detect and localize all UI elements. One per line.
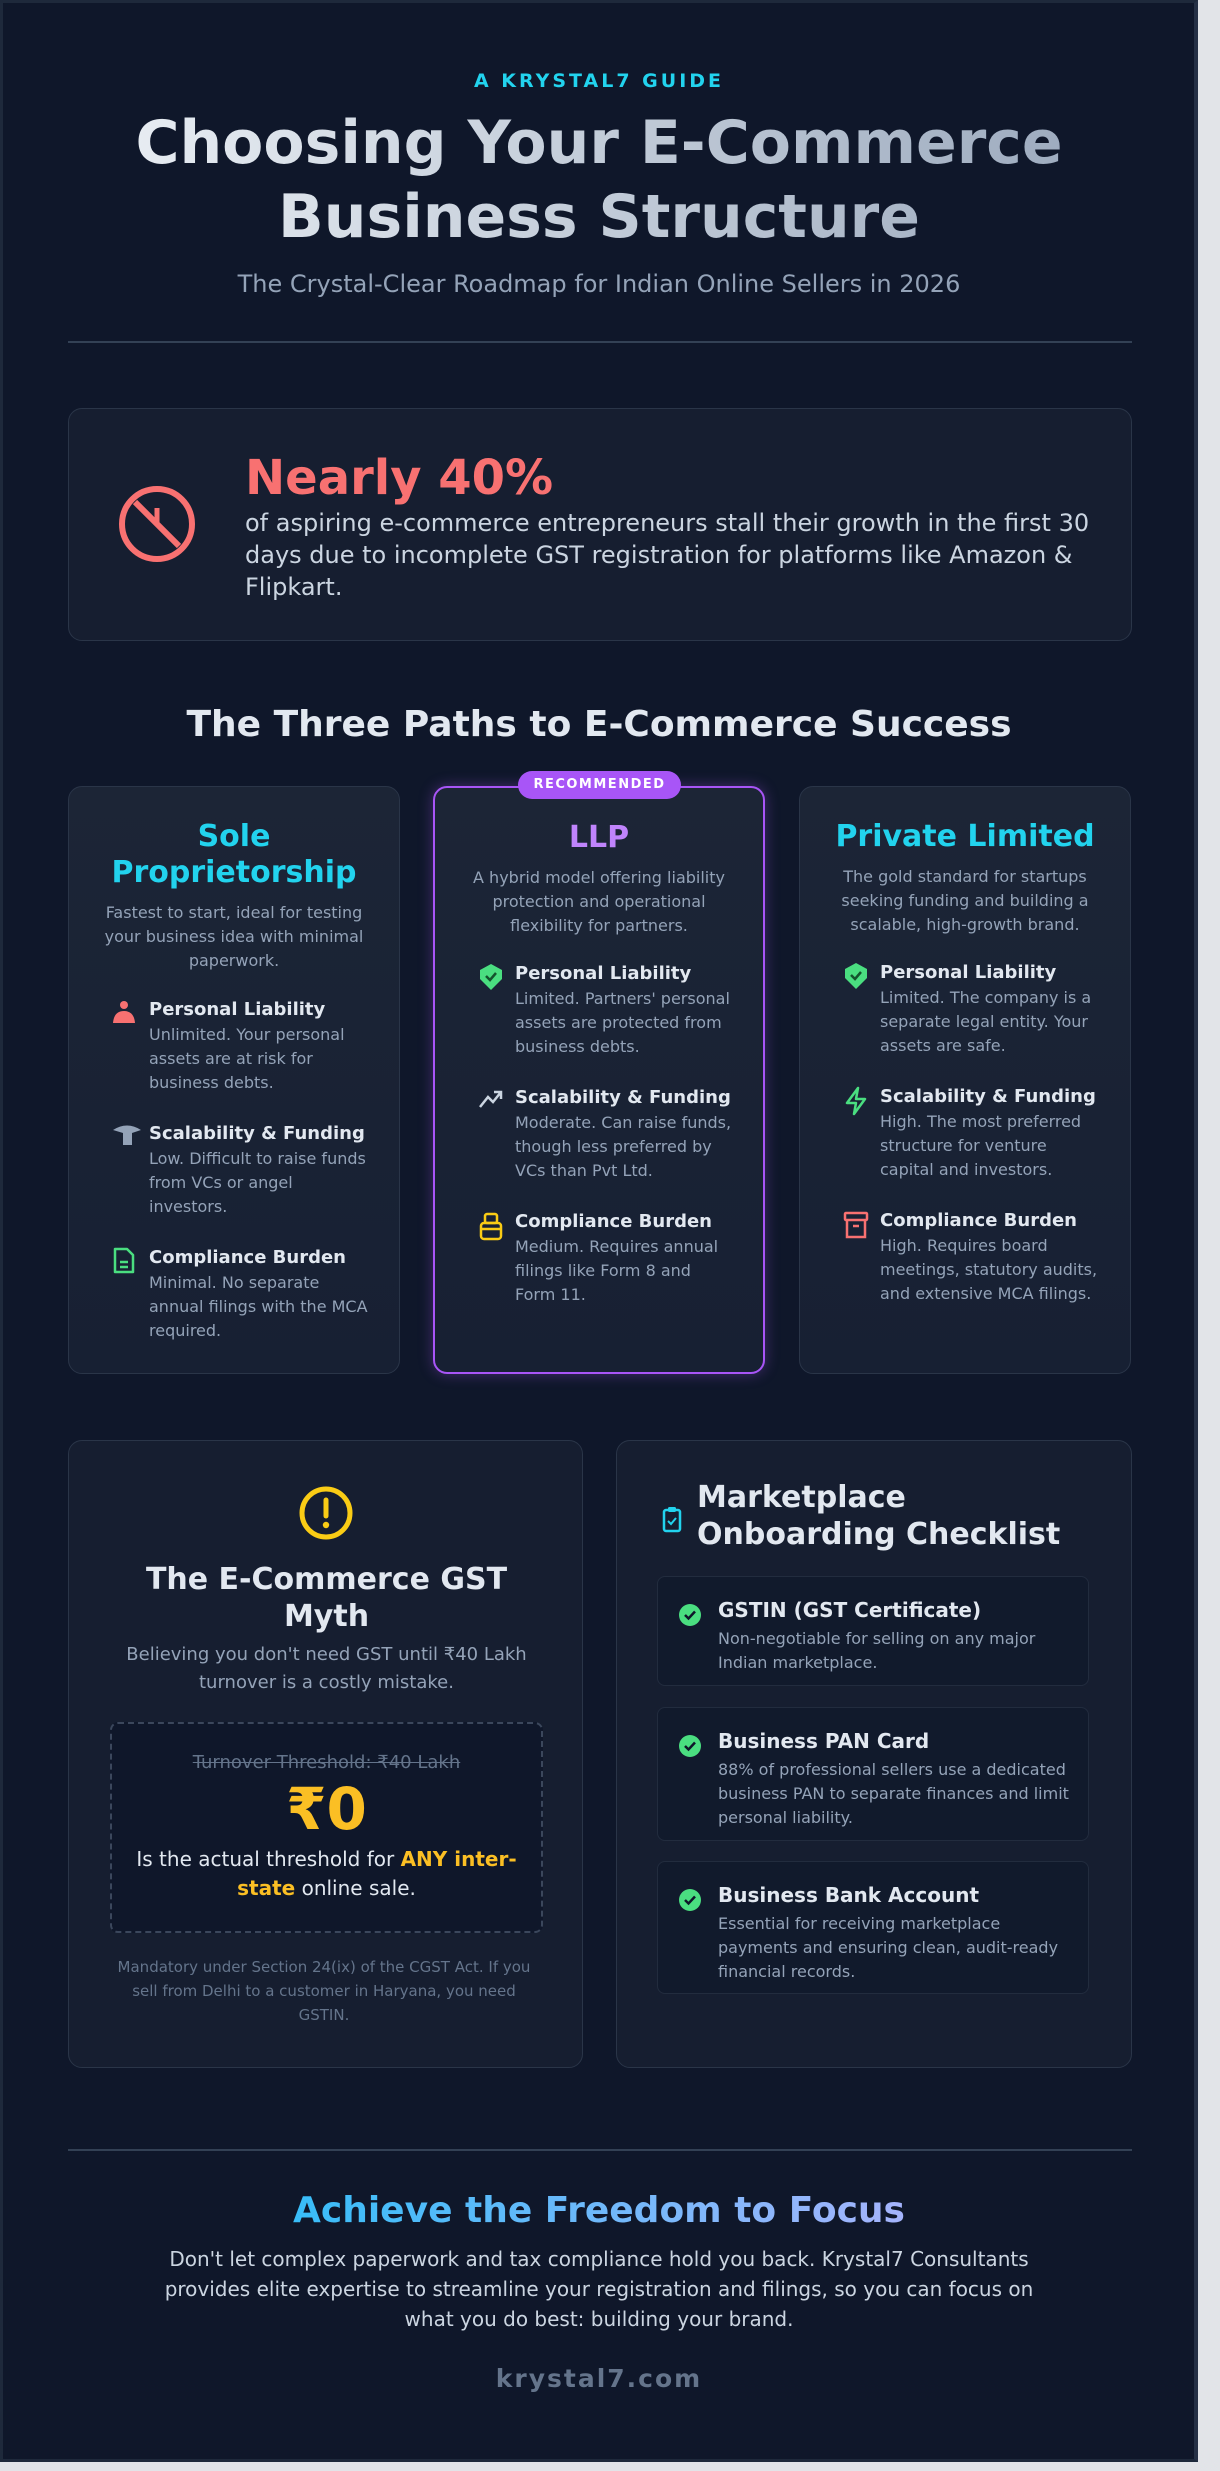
- panel: GST myth: [68, 1440, 583, 2068]
- feature: compliance: Compliance Burden: [149, 1247, 346, 1268]
- badge: recommended: [518, 771, 681, 799]
- checklist item: GSTIN: [657, 1576, 1089, 1686]
- panel: sole proprietorship: Fastest to start, ideal for testing your business idea with minimal paperwork.: [105, 903, 363, 970]
- feature: compliance: Minimal. No separate annual filings with the MCA required.: [149, 1273, 368, 1340]
- feature: compliance: [844, 1210, 1097, 1303]
- feature: scalability: Scalability & Funding: [149, 1123, 365, 1144]
- checklist item: bank: [657, 1861, 1089, 1994]
- heading: [697, 1480, 1060, 1552]
- panel: stat callout: [68, 408, 1132, 641]
- title: [0, 106, 1198, 254]
- footer url: krystal7.com: [496, 2364, 702, 2393]
- feature: liability: Unlimited. Your personal assets are at risk for business debts.: [149, 1025, 345, 1092]
- panel: LLP (recommended): LLP: [569, 820, 629, 855]
- feature: liability: [845, 962, 1091, 1055]
- icon: ban: [119, 486, 195, 562]
- feature: compliance: High. Requires board meetings, statutory audits, and extensive MCA filings.: [880, 1236, 1097, 1303]
- feature: scalability: [846, 1086, 1096, 1179]
- feature: liability: Personal Liability: [515, 963, 691, 984]
- feature: scalability: [113, 1123, 366, 1216]
- subtitle: The Crystal-Clear Roadmap for Indian Online Sellers in 2026: [238, 270, 960, 298]
- heading: [146, 1562, 507, 1634]
- checklist item: GSTIN: Non-negotiable for selling on any major Indian marketplace.: [718, 1629, 1035, 1672]
- heading: Marketplace: [697, 1480, 906, 1515]
- stat text: of aspiring e-commerce entrepreneurs stall their growth in the first 30 days due to incomplete GST registration for platforms like Amazon & Flipkart.: [245, 509, 1089, 601]
- title: Choosing Your E-Commerce: [135, 108, 1063, 178]
- checklist item: PAN: Business PAN Card: [718, 1729, 929, 1753]
- checklist item: PAN: 88% of professional sellers use a dedicated business PAN to separate finances and limit personal liability.: [718, 1760, 1069, 1827]
- stat text: Nearly 40%: [245, 450, 553, 506]
- feature: liability: Personal Liability: [880, 962, 1056, 983]
- feature: liability: [480, 963, 730, 1056]
- eyebrow: A KRYSTAL7 GUIDE: [474, 70, 724, 92]
- panel: LLP (recommended): A hybrid model offering liability protection and operational flexibility for partners.: [473, 868, 725, 935]
- heading: The E-Commerce GST: [146, 1562, 507, 1597]
- feature: liability: [113, 999, 345, 1092]
- feature: scalability: High. The most preferred structure for venture capital and investors.: [880, 1112, 1081, 1179]
- feature: scalability: Low. Difficult to raise funds from VCs or angel investors.: [149, 1149, 366, 1216]
- feature: compliance: Compliance Burden: [515, 1211, 712, 1232]
- feature: compliance: Medium. Requires annual filings like Form 8 and Form 11.: [515, 1237, 718, 1304]
- feature: liability: Limited. The company is a separate legal entity. Your assets are safe.: [880, 988, 1091, 1055]
- panel: LLP (recommended): [433, 786, 765, 1374]
- feature: compliance: [114, 1247, 368, 1340]
- feature: compliance: Compliance Burden: [880, 1210, 1077, 1231]
- icon: clipboard: [662, 1507, 682, 1532]
- feature: scalability: Scalability & Funding: [880, 1086, 1096, 1107]
- dashed callout: ₹0: [286, 1775, 367, 1843]
- checklist item: bank: Essential for receiving marketplace payments and ensuring clean, audit-ready financial records.: [718, 1914, 1058, 1981]
- stat text: [245, 450, 1089, 601]
- checklist item: PAN: [657, 1707, 1089, 1841]
- feature: scalability: [479, 1087, 731, 1180]
- feature: liability: Limited. Partners' personal assets are protected from business debts.: [515, 989, 730, 1056]
- feature: scalability: Moderate. Can raise funds, though less preferred by VCs than Pvt Ltd.: [515, 1113, 731, 1180]
- CTA heading: Achieve the Freedom to Focus: [293, 2190, 905, 2231]
- panel: private limited: The gold standard for startups seeking funding and building a scalable, high-growth brand.: [841, 867, 1089, 934]
- panel: private limited: [799, 786, 1131, 1374]
- icon: warning: [300, 1486, 352, 1540]
- dashed callout: Is the actual threshold for ANY inter-state online sale.: [136, 1847, 517, 1900]
- heading: Myth: [284, 1599, 369, 1634]
- feature: compliance: [480, 1211, 718, 1304]
- subtext: Believing you don't need GST until ₹40 Lakh turnover is a costly mistake.: [126, 1644, 527, 1693]
- panel: checklist: [616, 1440, 1132, 2068]
- feature: liability: Personal Liability: [149, 999, 325, 1020]
- CTA paragraph: Don't let complex paperwork and tax compliance hold you back. Krystal7 Consultants provides elite expertise to streamline your registration and filings, so you can focus on what you do best: building your brand.: [165, 2247, 1033, 2331]
- panel: sole proprietorship: Sole: [198, 819, 270, 854]
- panel: sole proprietorship: [68, 786, 400, 1374]
- feature: scalability: Scalability & Funding: [515, 1087, 731, 1108]
- title: Business Structure: [278, 182, 920, 252]
- dashed callout: [110, 1722, 543, 1933]
- footnote: Mandatory under Section 24(ix) of the CGST Act. If you sell from Delhi to a customer in Haryana, you need GSTIN.: [118, 1958, 530, 2024]
- section heading: The Three Paths to E-Commerce Success: [186, 704, 1012, 745]
- panel: sole proprietorship: Proprietorship: [111, 855, 356, 890]
- heading: Onboarding Checklist: [697, 1517, 1060, 1552]
- checklist item: bank: Business Bank Account: [718, 1883, 979, 1907]
- badge: recommended: RECOMMENDED: [533, 777, 666, 792]
- panel: private limited: Private Limited: [835, 819, 1095, 854]
- dashed callout: Turnover Threshold: ₹40 Lakh: [193, 1752, 460, 1773]
- checklist item: GSTIN: GSTIN (GST Certificate): [718, 1598, 981, 1622]
